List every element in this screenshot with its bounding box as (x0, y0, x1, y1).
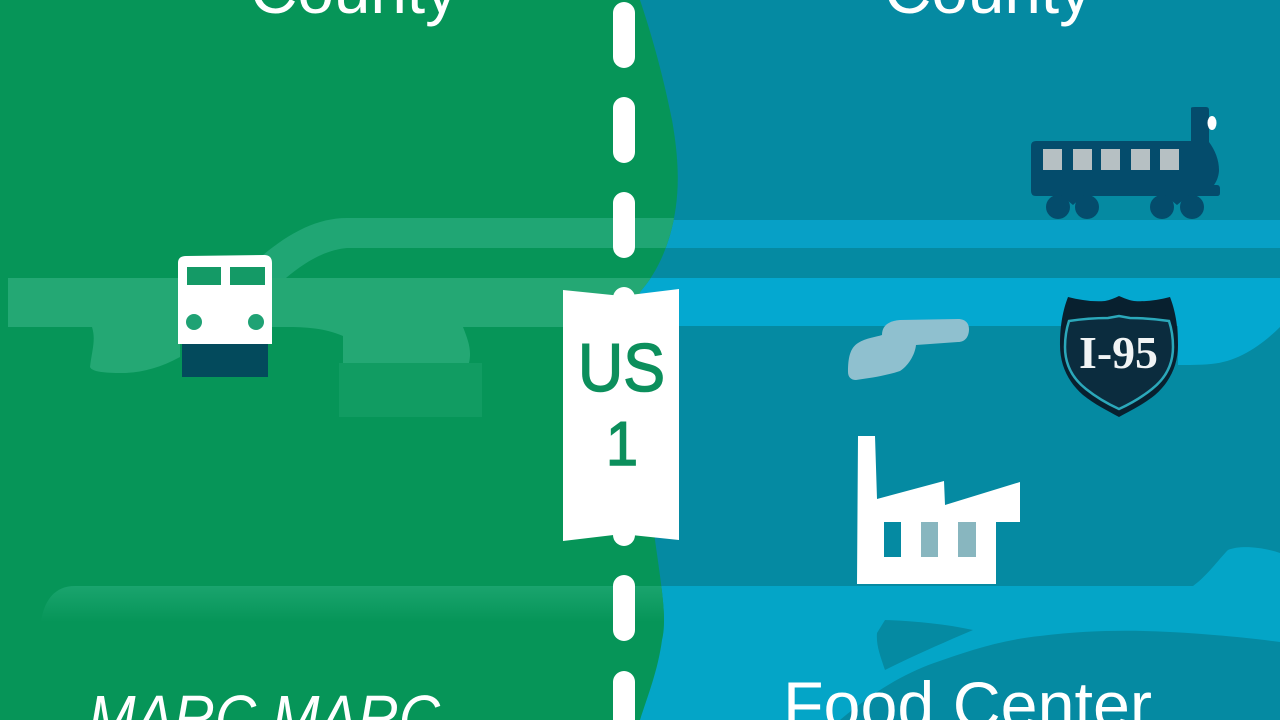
icon: pale blob (848, 319, 969, 380)
icon: steam train (1031, 107, 1220, 219)
road bands: right county (640, 220, 1280, 720)
sign text: 1: 1 (606, 410, 638, 479)
panel: right county background (640, 0, 1280, 720)
dashed centre line (613, 2, 635, 720)
road bands: left county (8, 218, 700, 622)
panel: left county background (0, 0, 700, 720)
icon: I-95 shield (1060, 296, 1178, 417)
sign text: US: US (578, 330, 665, 406)
shield text: I-95: I-95 (1079, 327, 1158, 378)
icon: US 1 road sign (563, 289, 679, 541)
icon: MARC commuter train (178, 255, 272, 377)
icon: factory (857, 436, 1020, 584)
